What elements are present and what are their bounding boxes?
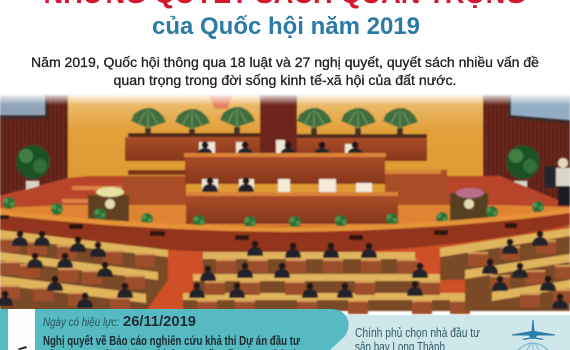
side note text <box>355 326 480 350</box>
top row of palms <box>131 107 418 138</box>
right screen <box>508 95 570 124</box>
lower presidium desk <box>186 192 398 224</box>
left podium <box>88 187 129 226</box>
upper presidium seats and people <box>197 140 363 157</box>
effective date: Ngày có hiệu lực: <box>43 315 119 329</box>
panel: teal resolution card <box>0 309 349 350</box>
photo: National Assembly hall <box>0 93 570 314</box>
gold back wall <box>66 95 486 210</box>
delegates center block <box>183 241 473 314</box>
upper presidium desk <box>184 153 386 184</box>
left wood wall <box>0 95 68 196</box>
white date strip <box>8 309 35 350</box>
right podium <box>450 188 488 225</box>
side note text: Chính phủ chọn nhà đầu tư <box>355 326 480 340</box>
subtitle: của Quốc hội năm 2019 <box>152 13 420 40</box>
intro text <box>31 54 539 88</box>
left screen <box>0 95 48 119</box>
back desks <box>125 133 427 161</box>
effective date <box>43 314 196 330</box>
intro text: quan trọng trong đời sống kinh tế-xã hội của đất nước. <box>114 72 456 88</box>
lower presidium seats and people <box>202 178 372 195</box>
red carpet steps <box>0 176 570 210</box>
panel: right light-blue background <box>300 315 570 350</box>
curved front wall of stage <box>0 211 570 254</box>
effective date: 26/11/2019 <box>123 314 196 330</box>
delegates right block <box>440 228 570 311</box>
intro text: Năm 2019, Quốc hội thông qua 18 luật và 27 nghị quyết, quyết sách nhiều vấn đề <box>31 54 539 70</box>
icon: airplane over globe <box>512 320 555 350</box>
vents in stage wall <box>0 215 517 240</box>
stage floor <box>0 205 570 226</box>
resolution text: Nghị quyết về Báo cáo nghiên cứu khả thi Dự án đầu tư <box>43 334 301 348</box>
right potted plant <box>506 145 540 197</box>
left potted plant <box>16 145 50 197</box>
resolution text <box>43 334 301 350</box>
delegates left block <box>0 230 168 311</box>
camera operator <box>544 158 570 206</box>
top fade of photo into white <box>0 93 570 105</box>
right wood wall <box>483 95 570 205</box>
side stage blocks <box>122 170 447 210</box>
stage edge plants <box>3 197 544 228</box>
central pillar with emblem <box>209 95 297 153</box>
icon: dark mark on strip <box>17 346 27 350</box>
